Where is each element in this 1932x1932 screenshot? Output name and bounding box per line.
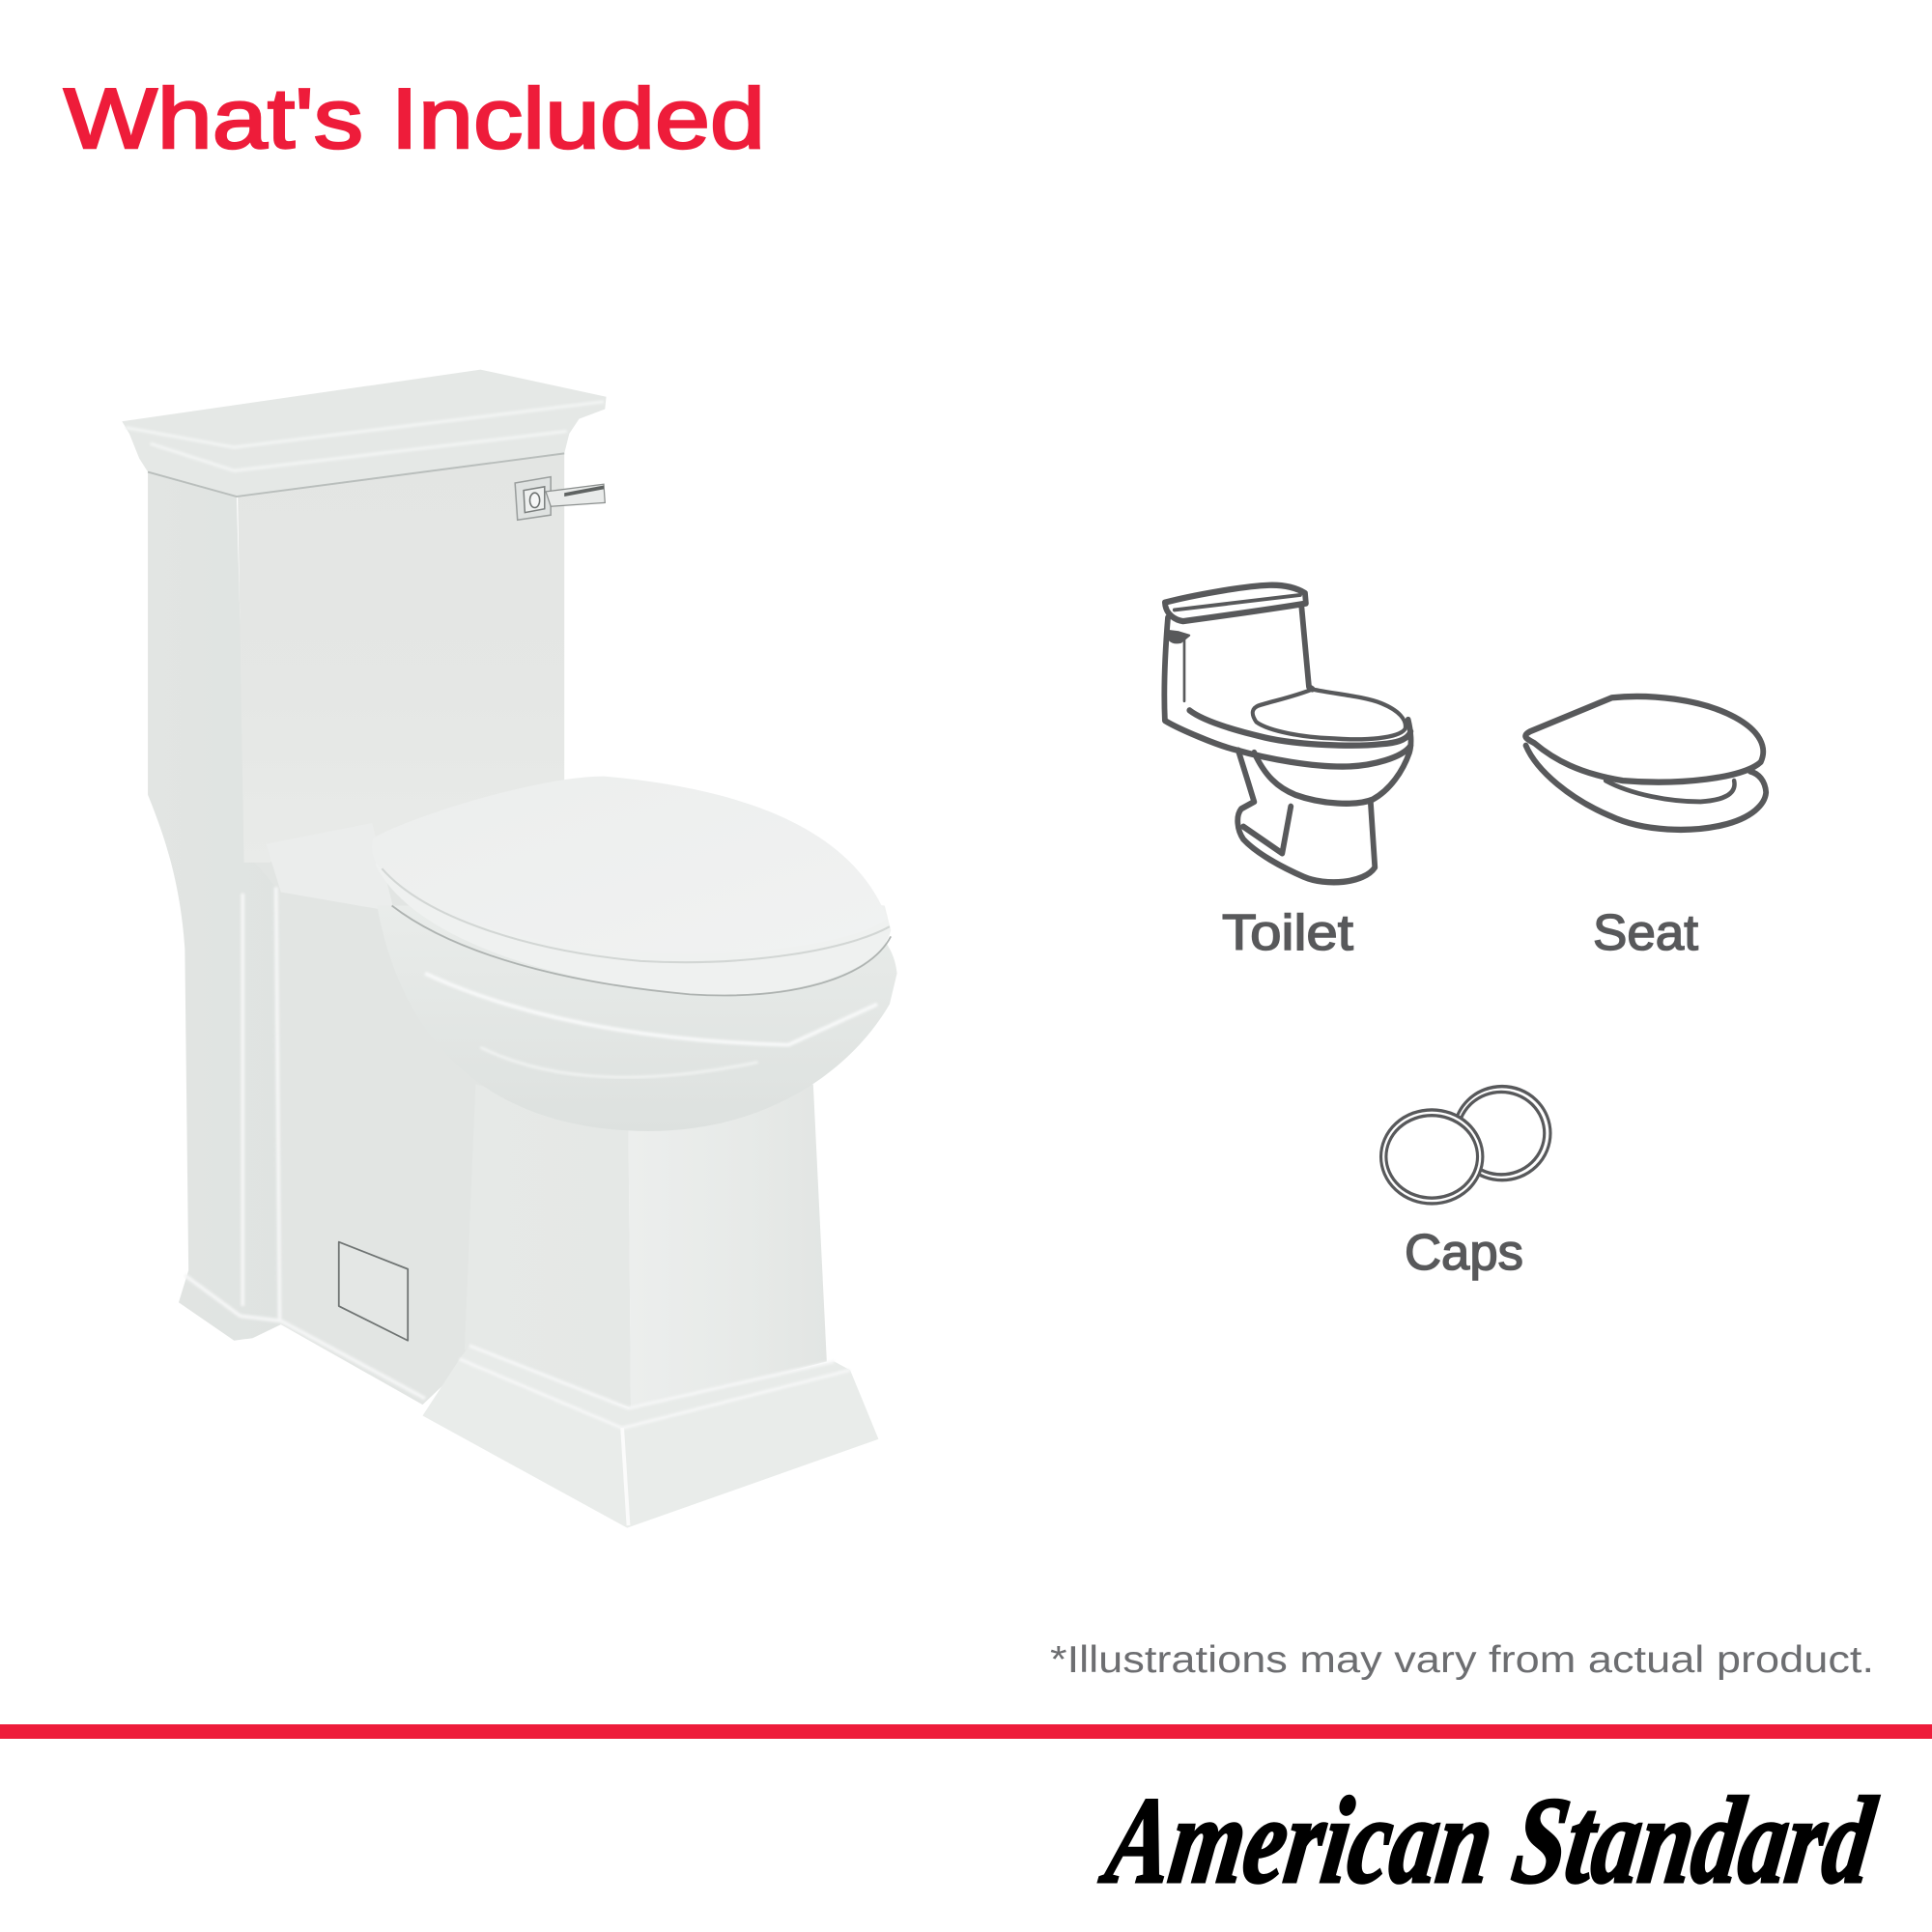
pedestal right face (629, 1084, 827, 1413)
bowl (377, 905, 897, 1131)
label: seat: Seat (1593, 905, 1699, 961)
tank side and column (148, 472, 281, 1341)
label: caps: Caps (1405, 1225, 1523, 1281)
label: toilet: Toilet (1222, 905, 1354, 961)
icon: caps (1381, 1087, 1550, 1204)
seat lid (372, 777, 887, 953)
column highlights (185, 887, 425, 1399)
icon: seat (1525, 696, 1766, 830)
product photo: one-piece toilet (122, 370, 897, 1528)
seat bracket (267, 823, 394, 912)
seat ring (376, 850, 891, 995)
seat edge lines (382, 868, 890, 962)
tank lid (122, 370, 607, 497)
icon: toilet (1164, 585, 1411, 882)
red divider band (0, 1724, 1932, 1739)
rear lower body (244, 801, 493, 1405)
pedestal left face (465, 1084, 631, 1408)
seat ring lower edge (392, 905, 891, 995)
disclaimer note: *Illustrations may vary from actual product. (1050, 1639, 1874, 1681)
tank front (238, 452, 564, 863)
flush handle (515, 477, 605, 520)
title: What's Included (64, 71, 765, 166)
access panel (339, 1242, 408, 1341)
plinth (422, 1346, 878, 1528)
